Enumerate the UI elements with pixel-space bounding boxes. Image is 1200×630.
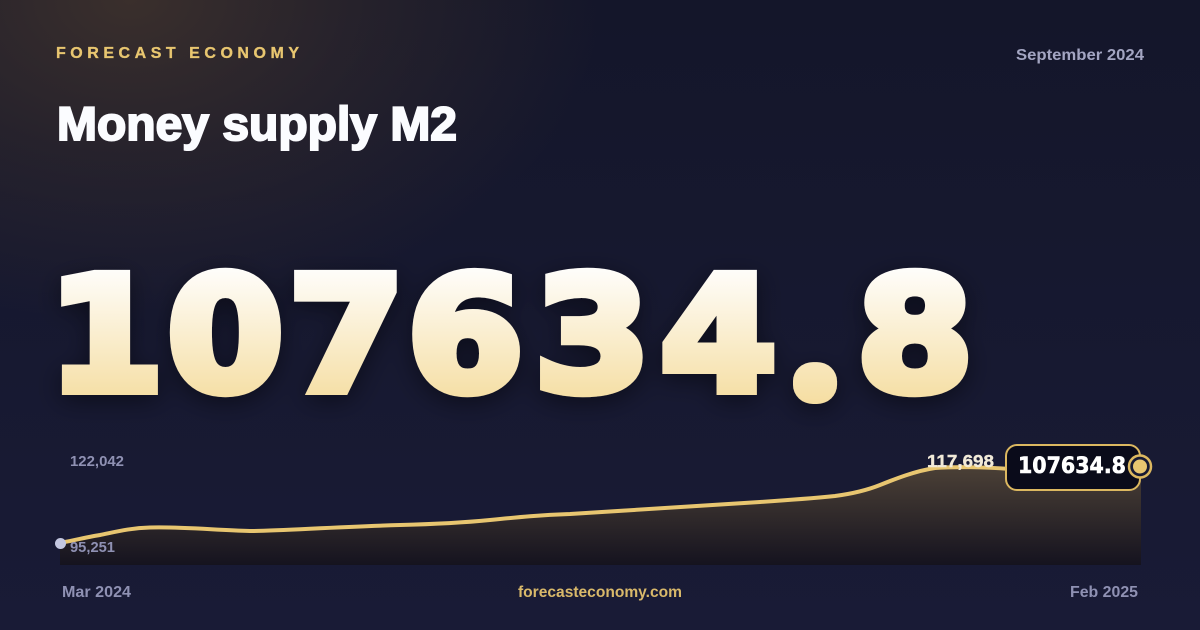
min label: 95,251 <box>70 540 115 556</box>
current value badge <box>1006 445 1140 490</box>
eyebrow: FORECAST ECONOMY: FORECAST ECONOMY <box>56 45 299 62</box>
trend line <box>60 467 1010 543</box>
chart: money supply line <box>55 467 1141 565</box>
date: September 2024 <box>1016 47 1144 64</box>
end date: Feb 2025 <box>1070 584 1138 601</box>
current point marker <box>1129 456 1151 478</box>
title: Money supply M2 <box>57 97 457 150</box>
headline value: 8 <box>857 244 973 428</box>
headline value: 107634 <box>48 244 777 428</box>
start point marker <box>55 538 66 549</box>
current value badge: 107634.8 <box>1018 454 1126 479</box>
source: forecasteconomy.com <box>518 584 682 601</box>
chart area fill <box>60 467 1141 565</box>
headline value: . <box>811 367 819 390</box>
start date: Mar 2024 <box>62 584 131 601</box>
max label: 122,042 <box>70 454 124 470</box>
peak label: 117,698 <box>927 451 994 471</box>
